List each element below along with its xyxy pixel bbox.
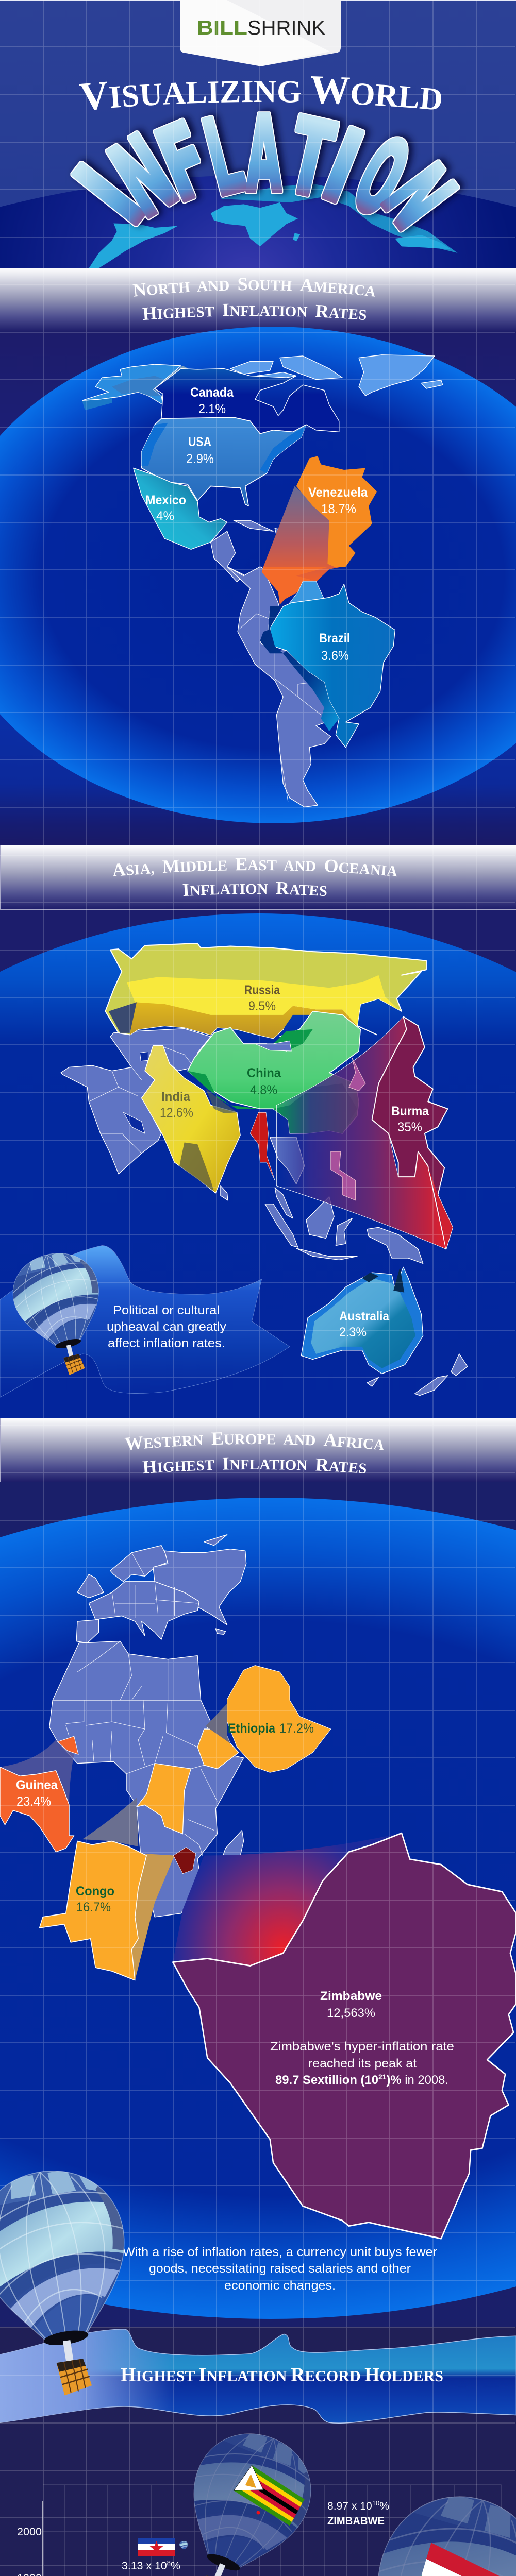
- label: usa: [186, 435, 214, 466]
- venezuela enlarged: [296, 456, 377, 567]
- congo small: [137, 1764, 191, 1834]
- burma beam: [276, 1016, 446, 1249]
- section background: americas: [0, 268, 516, 845]
- label: mexico: 4%: [156, 509, 174, 523]
- label: yugoslavia record: 8: [167, 2559, 171, 2567]
- chart: record holders: [17, 2415, 516, 2576]
- balloon: hungary: [329, 2476, 516, 2576]
- section background: asia: [0, 910, 516, 1418]
- guyanas: [290, 581, 324, 603]
- caspian and gulf: [123, 1052, 148, 1133]
- globe continents: [89, 184, 458, 268]
- label: zimbabwe record: ZIMBABWE: [327, 2515, 385, 2527]
- section background: europe and africa: [0, 1482, 516, 2327]
- label: ethiopia: [228, 1721, 314, 1736]
- ethiopia small: [197, 1729, 239, 1769]
- alaska: [82, 364, 188, 410]
- australia: [301, 1267, 423, 1374]
- label: congo: Congo: [76, 1884, 114, 1899]
- heading: americas line 1: NORTH AND SOUTH AMERICA: [133, 278, 375, 297]
- title: inflation: N: [93, 114, 195, 241]
- chart grid: [43, 2485, 501, 2576]
- russia dark wedge: [109, 1002, 137, 1033]
- canada: [155, 369, 339, 434]
- heading: asia line 2: INFLATION RATES: [182, 882, 327, 896]
- globe horizon: [0, 175, 516, 814]
- africa globe: [0, 1498, 516, 2319]
- label: yugoslavia record: 3.13 x 10: [122, 2560, 166, 2572]
- label: india: India: [161, 1090, 191, 1104]
- callout ribbon: political upheaval: [0, 1245, 290, 1397]
- label: russia: Russia: [244, 983, 280, 997]
- guinea enlarged: [0, 1767, 74, 1852]
- china: [188, 1011, 360, 1133]
- mexico: [134, 468, 227, 549]
- label: guinea: [16, 1778, 58, 1809]
- label: australia: 2.3%: [339, 1325, 367, 1340]
- central america and caribbean: [211, 520, 287, 582]
- title: inflation: N: [361, 147, 475, 247]
- label: yugoslavia record: [122, 2559, 189, 2576]
- title: inflation: L: [194, 94, 254, 220]
- mongolia: [255, 1041, 291, 1051]
- label: guinea: 23.4%: [16, 1794, 51, 1809]
- heading: americas line 2: HIGHEST INFLATION RATES: [142, 304, 366, 320]
- label: zimbabwe: Zimbabwe's hyper-inflation rate: [270, 2040, 454, 2054]
- label: china: China: [247, 1066, 281, 1080]
- label: canada: [190, 385, 234, 416]
- arctic islands and greenland: [230, 355, 443, 396]
- map: americas: [82, 355, 443, 807]
- map: asia: [61, 943, 468, 1396]
- text: rise of inflation: economic changes.: [224, 2279, 336, 2293]
- china dark green areas: [188, 1029, 357, 1133]
- title: inflation: I: [53, 145, 169, 245]
- africa north: [53, 1641, 201, 1700]
- text: rise of inflation: [123, 2245, 437, 2293]
- asia globe: [0, 913, 516, 1666]
- guinea small: [58, 1736, 78, 1754]
- label: china: [247, 1066, 281, 1097]
- heading: europe line 1: WESTERN EUROPE AND AFRICA: [125, 1432, 384, 1450]
- south america: [227, 567, 336, 807]
- logo card: SHRINK: [247, 17, 325, 39]
- title: inflation: [53, 94, 475, 247]
- label: burma: [391, 1104, 429, 1134]
- balloon: asia callout: [4, 1244, 118, 1384]
- label: brazil: 3.6%: [321, 649, 349, 663]
- label: ethiopia: Ethiopia: [228, 1721, 276, 1736]
- indochina and sri lanka: [221, 1137, 468, 1396]
- label: zimbabwe record: 8.97 x 10: [327, 2500, 372, 2512]
- title: inflation: O: [336, 115, 426, 240]
- label: mexico: Mexico: [145, 493, 186, 507]
- banner: asia: [0, 845, 516, 910]
- label: zimbabwe: )%: [386, 2073, 402, 2087]
- text: political upheaval: upheaval can greatly: [107, 1320, 226, 1334]
- label: congo: 16.7%: [76, 1900, 111, 1914]
- y axis labels: 2000: [17, 2526, 42, 2538]
- text: rise of inflation: goods, necessitating raised salaries and other: [149, 2262, 411, 2276]
- label: brazil: Brazil: [319, 631, 350, 646]
- russia bright band: [127, 975, 400, 1026]
- logo card: [180, 0, 341, 66]
- label: canada: Canada: [190, 385, 234, 400]
- label: yugoslavia record: %: [171, 2560, 180, 2572]
- flag: hungary: [417, 2543, 516, 2576]
- label: zimbabwe: reached its peak at: [308, 2057, 417, 2071]
- banner: north and south america: [0, 268, 516, 332]
- label: venezuela: 18.7%: [321, 502, 356, 516]
- text: political upheaval: affect inflation rates.: [108, 1336, 225, 1350]
- label: canada: 2.1%: [198, 402, 226, 416]
- usa: [142, 417, 306, 506]
- label: india: [160, 1090, 193, 1120]
- chart axes: [43, 2501, 501, 2576]
- africa south: [49, 1700, 244, 1917]
- title: inflation: A: [246, 94, 281, 215]
- label: china: 4.8%: [250, 1083, 277, 1097]
- india beam: [179, 1142, 214, 1191]
- usa side shading: [142, 423, 306, 473]
- label: australia: Australia: [339, 1309, 390, 1324]
- y axis labels: [17, 2526, 42, 2576]
- americas globe: [0, 327, 516, 823]
- burma red wedge: [428, 1166, 453, 1249]
- title: inflation: T: [278, 96, 342, 222]
- label: usa: 2.9%: [186, 452, 214, 466]
- guinea beam: [0, 1740, 74, 1805]
- label: congo: [76, 1884, 114, 1914]
- label: ethiopia: 17.2%: [279, 1721, 314, 1736]
- zimbabwe enlarged: [173, 1833, 516, 2239]
- title: inflation: F: [143, 100, 225, 225]
- flag: zimbabwe: [234, 2465, 305, 2526]
- label: mexico: [145, 493, 186, 523]
- label: zimbabwe: 12,563%: [327, 2006, 375, 2020]
- india: [142, 1045, 240, 1193]
- label: russia: [244, 983, 280, 1013]
- label: brazil: [319, 631, 350, 663]
- indonesia and islands: [265, 1204, 298, 1247]
- zimbabwe small: [174, 1847, 196, 1874]
- label: zimbabwe: 89.7 Sextillion (10: [275, 2073, 402, 2087]
- logo card: BILL: [197, 17, 247, 39]
- ethiopia beam: [206, 1700, 230, 1743]
- panel: header: [0, 0, 516, 814]
- text: political upheaval: [107, 1303, 226, 1350]
- burma enlarged: [372, 1016, 453, 1249]
- burma small: [250, 1112, 275, 1180]
- title: inflation: I: [308, 107, 376, 226]
- tiny balloons: [85, 2541, 188, 2576]
- label: zimbabwe: Zimbabwe: [320, 1989, 382, 2003]
- russia gold band: [130, 1002, 357, 1038]
- label: zimbabwe: [270, 1989, 454, 2087]
- congo beam: [82, 1798, 138, 1846]
- zimbabwe beam: [173, 1833, 402, 1966]
- label: zimbabwe record: [327, 2499, 389, 2527]
- label: venezuela: Venezuela: [308, 485, 368, 500]
- brazil: [270, 584, 395, 748]
- venezuela small: [262, 567, 329, 605]
- label: venezuela: [308, 485, 368, 516]
- flag: yugoslavia: [138, 2538, 175, 2556]
- map: europe and africa: [0, 1535, 516, 2239]
- label: burma: 35%: [397, 1120, 422, 1134]
- venezuela callout beam: [263, 486, 342, 582]
- heading: asia line 1: ASIA, MIDDLE EAST AND OCEANIA: [113, 858, 397, 877]
- text: rise of inflation: With a rise of inflation rates, a currency unit buys fewer: [123, 2245, 437, 2259]
- heading: record holders: HIGHEST INFLATION RECORD HOLDERS: [121, 2364, 443, 2386]
- heading: europe line 2: HIGHEST INFLATION RATES: [142, 1457, 366, 1473]
- title: visualizing world: VISUALIZING WORLD: [79, 76, 441, 110]
- label: russia: 9.5%: [248, 999, 276, 1013]
- russia: [105, 943, 426, 1038]
- text: political upheaval: Political or cultural: [113, 1303, 220, 1317]
- west asia: [61, 1029, 211, 1174]
- label: usa: USA: [188, 435, 211, 449]
- label: australia: [339, 1309, 390, 1340]
- label: zimbabwe: 21: [378, 2073, 387, 2081]
- banner: europe and africa: [0, 1418, 516, 1483]
- label: zimbabwe: in 2008.: [405, 2073, 449, 2087]
- brazil extruded edge: [260, 606, 339, 731]
- label: zimbabwe record: %: [379, 2500, 389, 2512]
- label: india: 12.6%: [160, 1106, 193, 1120]
- japan and philippines: [331, 1058, 365, 1200]
- label: zimbabwe record: 10: [372, 2499, 379, 2507]
- data points: [68, 2511, 471, 2576]
- ethiopia enlarged: [227, 1666, 331, 1772]
- europe: [76, 1535, 246, 1643]
- label: guinea: Guinea: [16, 1778, 58, 1792]
- label: burma: Burma: [391, 1104, 429, 1118]
- madagascar: [221, 1830, 244, 1880]
- ribbon: record holders: [0, 2329, 516, 2423]
- congo enlarged: [40, 1841, 146, 1980]
- balloon: record holders ribbon: [0, 2159, 149, 2405]
- balloon: zimbabwe: [152, 2415, 329, 2576]
